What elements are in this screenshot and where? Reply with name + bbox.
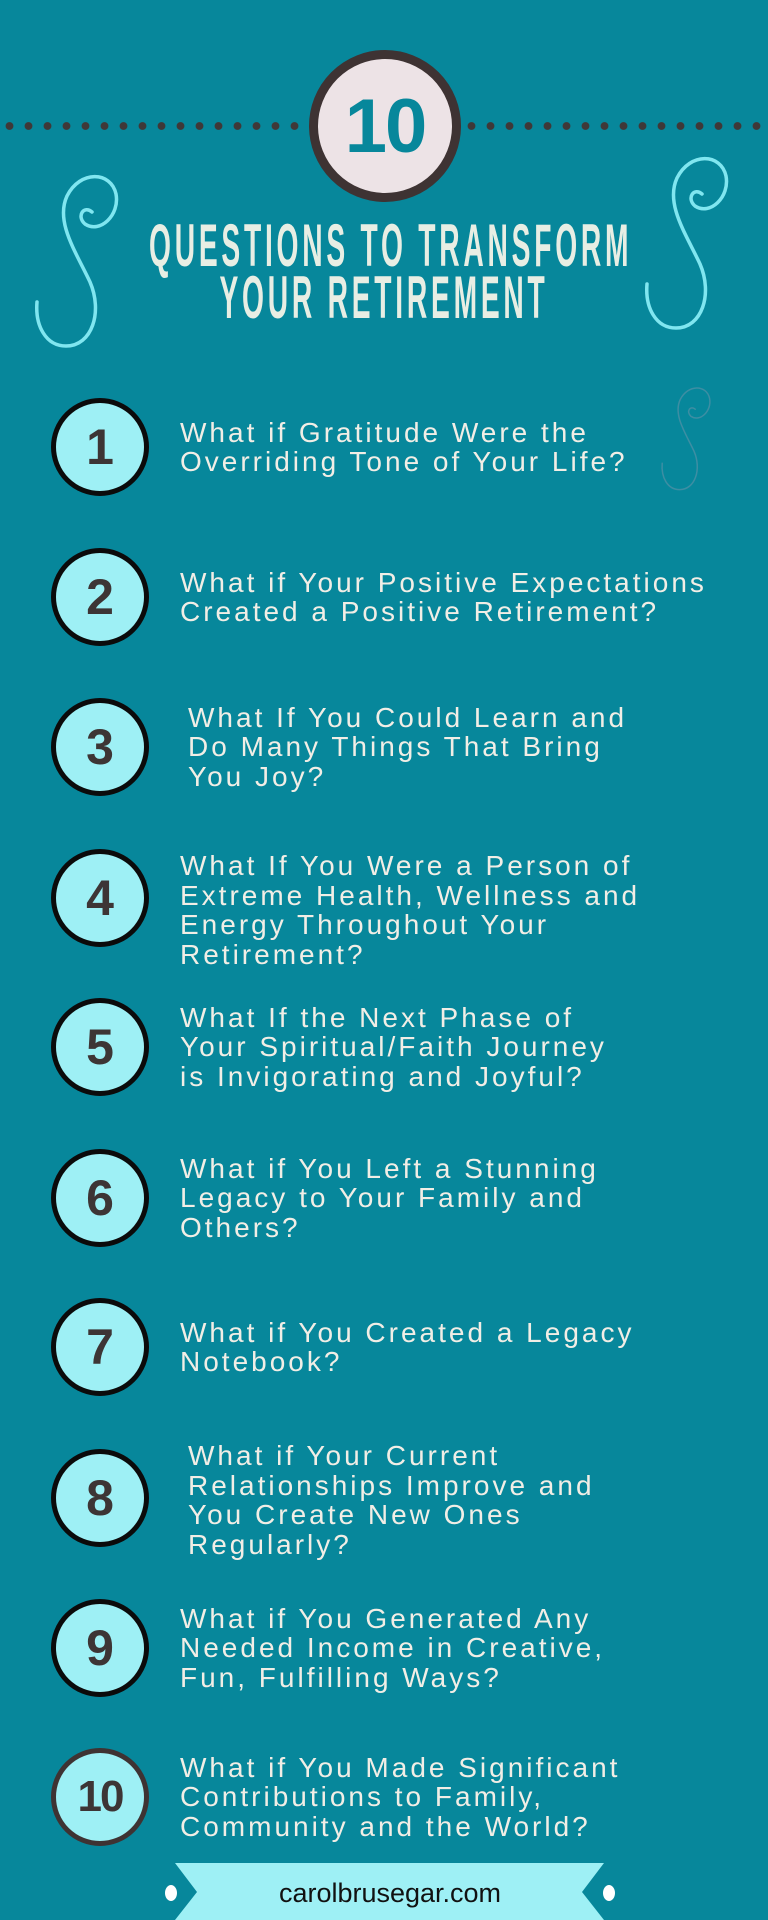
item 10: 10	[78, 1772, 122, 1821]
item 7: Notebook?	[180, 1346, 342, 1377]
item 1: Overriding Tone of Your Life?	[180, 446, 628, 477]
item 4: Retirement?	[180, 938, 366, 970]
item 1: What if Gratitude Were the	[180, 416, 589, 448]
title: QUESTIONS TO TRANSFORM	[149, 212, 632, 279]
item 8: You Create New Ones	[188, 1499, 523, 1530]
item 2: Created a Positive Retirement?	[180, 596, 659, 627]
item 6: Others?	[180, 1212, 301, 1243]
item 8	[51, 1440, 595, 1560]
header badge: 10: 10	[345, 84, 425, 168]
item 8: Relationships Improve and	[188, 1470, 595, 1500]
item 9: Needed Income in Creative,	[180, 1632, 605, 1663]
item 4: Energy Throughout Your	[180, 909, 549, 940]
icon: faint swirl	[661, 387, 711, 490]
item 6: 6	[86, 1170, 114, 1226]
item 8: 8	[86, 1470, 114, 1526]
item 4: 4	[86, 870, 114, 926]
item 8: What if Your Current	[188, 1440, 500, 1471]
item 3: What If You Could Learn and	[188, 702, 627, 733]
item 6: Legacy to Your Family and	[180, 1182, 585, 1213]
item 10: Contributions to Family,	[180, 1781, 544, 1812]
item 7: What if You Created a Legacy	[180, 1316, 634, 1348]
item 5: is Invigorating and Joyful?	[180, 1061, 585, 1092]
item 9: Fun, Fulfilling Ways?	[180, 1662, 502, 1693]
item 4: What If You Were a Person of	[180, 850, 632, 881]
item 5: 5	[86, 1019, 114, 1075]
item 3: Do Many Things That Bring	[188, 731, 603, 762]
item 2: What if Your Positive Expectations	[180, 566, 707, 598]
footer banner: carolbrusegar.com	[279, 1878, 501, 1908]
item 10	[51, 1748, 620, 1846]
item 10: Community and the World?	[180, 1811, 591, 1842]
item 7	[51, 1298, 634, 1396]
item 1	[51, 398, 628, 496]
title: YOUR RETIREMENT	[219, 264, 549, 331]
item 8: Regularly?	[188, 1528, 352, 1560]
item 3: You Joy?	[188, 761, 326, 792]
item 4: Extreme Health, Wellness and	[180, 880, 640, 910]
item 9: 9	[86, 1620, 114, 1676]
icon: left swirl	[35, 174, 118, 348]
item 1: 1	[86, 419, 114, 475]
header badge: 10	[309, 50, 461, 202]
item 6: What if You Left a Stunning	[180, 1153, 599, 1184]
icon: right swirl	[645, 156, 728, 330]
item 2	[51, 548, 707, 646]
item 7: 7	[86, 1319, 114, 1375]
item 5: What If the Next Phase of	[180, 1002, 574, 1033]
item 3	[51, 698, 627, 796]
item 5: Your Spiritual/Faith Journey	[180, 1031, 607, 1062]
item 9: What if You Generated Any	[180, 1603, 591, 1634]
item 10: What if You Made Significant	[180, 1752, 620, 1783]
item 9	[51, 1599, 605, 1697]
item 6	[51, 1149, 599, 1247]
item 3: 3	[86, 719, 114, 775]
footer banner	[165, 1863, 615, 1920]
item 2: 2	[86, 569, 114, 625]
item 4	[51, 849, 640, 970]
item 5	[51, 998, 607, 1096]
title	[149, 212, 632, 331]
